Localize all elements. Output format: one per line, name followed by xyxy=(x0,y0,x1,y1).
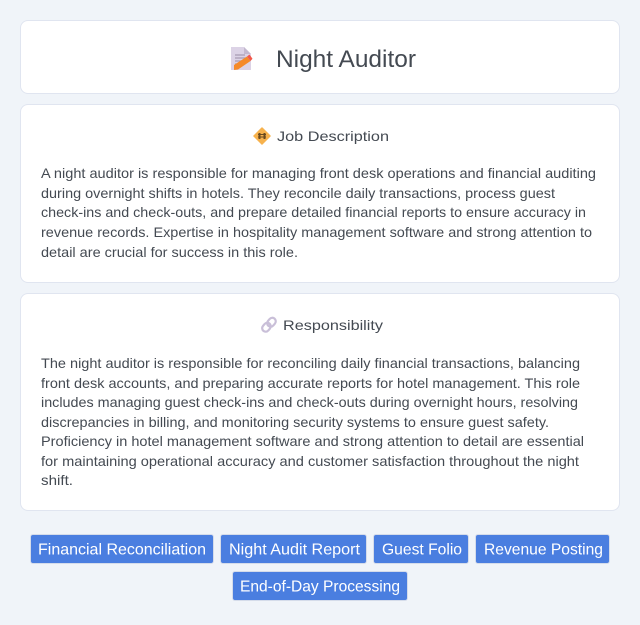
tag: revenue posting: Revenue Posting xyxy=(484,542,603,558)
panel: job description xyxy=(20,104,620,283)
text block: job description: A night auditor is responsible for managing front desk operations and financial auditing xyxy=(41,165,596,181)
icon: document with pencil xyxy=(231,47,252,70)
heading: responsibility: Responsibility xyxy=(283,317,383,333)
title: Night Auditor xyxy=(276,46,416,73)
text block: job description: detail are crucial for success in this role. xyxy=(41,244,298,260)
tag: end-of-day processing xyxy=(232,571,408,601)
text block: job description: revenue records. Expertise in hospitality management software and strong attention to xyxy=(41,224,592,240)
text block: job description xyxy=(41,165,596,260)
tag: financial reconciliation: Financial Reconciliation xyxy=(38,542,206,558)
icon: chain link xyxy=(261,316,277,333)
icon: diamond sign xyxy=(253,127,271,145)
text block: responsibility xyxy=(41,355,584,488)
tag: night audit report xyxy=(220,534,367,564)
tag: financial reconciliation xyxy=(30,534,214,564)
tag: revenue posting xyxy=(475,534,610,564)
tag: guest folio xyxy=(373,534,469,564)
text block: job description: check-ins and check-outs, and prepare detailed financial reports to ensure accuracy in xyxy=(41,204,586,220)
text block: responsibility: Proficiency in hotel management software and strong attention to detail are essential xyxy=(41,433,584,449)
text block: responsibility: shift. xyxy=(41,472,73,488)
tag: end-of-day processing: End-of-Day Processing xyxy=(240,578,400,596)
text block: responsibility: front desk accounts, and preparing accurate reports for hotel management. This role xyxy=(41,375,580,391)
tag: guest folio: Guest Folio xyxy=(382,542,462,558)
tag: night audit report: Night Audit Report xyxy=(229,542,361,558)
panel: responsibility xyxy=(20,293,620,511)
text block: responsibility: for maintaining operational accuracy and customer satisfaction throughout the night xyxy=(41,453,579,469)
text block: responsibility: The night auditor is responsible for reconciling daily financial transactions, balancing xyxy=(41,355,580,371)
text block: responsibility: discrepancies in billing, and monitoring security systems to ensure guest safety. xyxy=(41,414,549,430)
text block: job description: during overnight shifts in hotels. They reconcile daily transactions, process guest xyxy=(41,185,555,201)
heading: job description: Job Description xyxy=(277,128,389,144)
panel: header xyxy=(20,20,620,94)
text block: responsibility: includes managing guest check-ins and check-outs during overnight hours, resolving xyxy=(41,394,578,410)
